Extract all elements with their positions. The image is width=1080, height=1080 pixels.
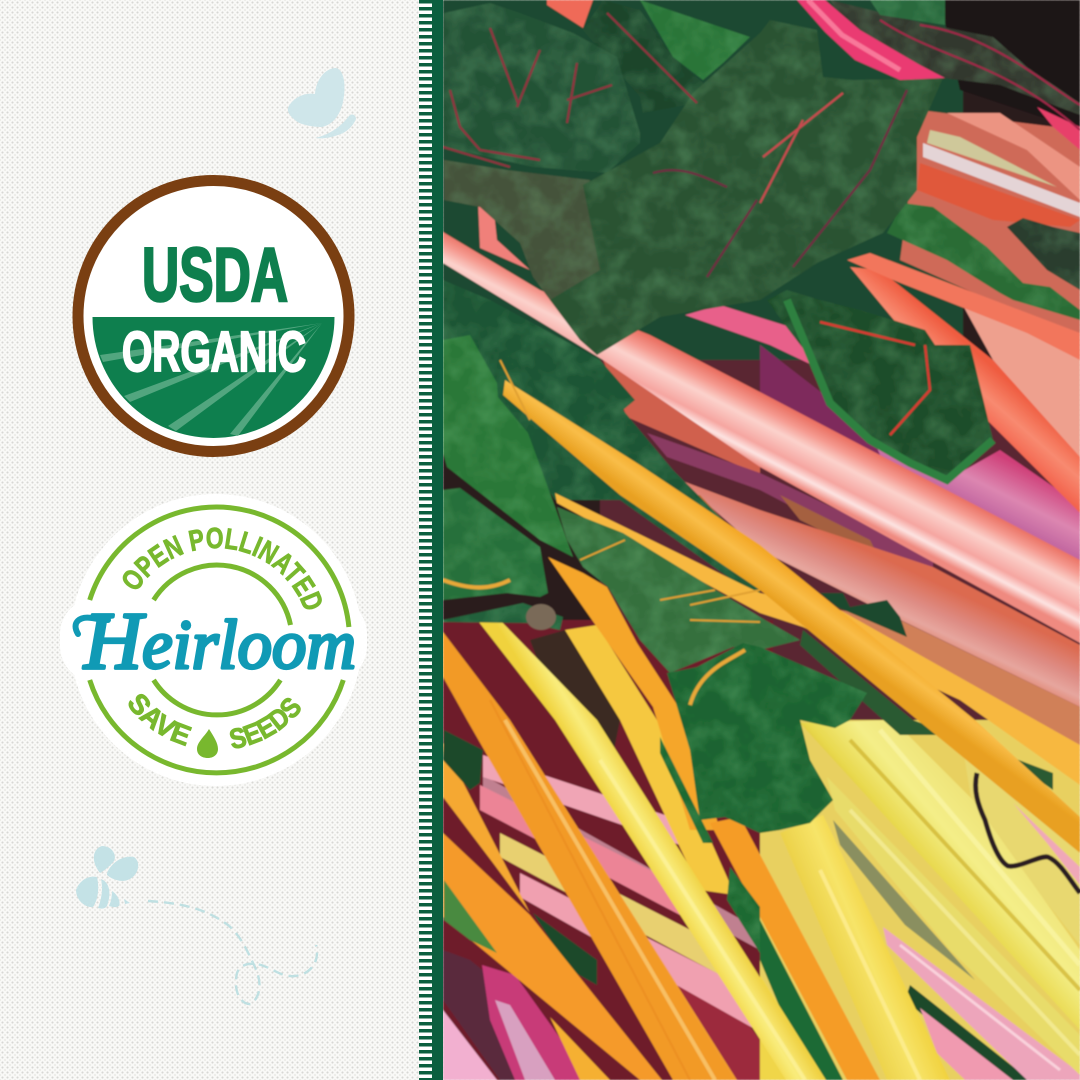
SAVE text: SAVE xyxy=(128,694,192,746)
decorative striped edge xyxy=(419,0,443,1080)
seal ring xyxy=(78,180,349,452)
SEEDS text: SEEDS xyxy=(230,698,301,748)
bottom right back stalks: pale yellow, pink and grey green xyxy=(760,720,1080,1080)
stalk highlights xyxy=(490,700,1080,1080)
orange stalks in front of pink xyxy=(503,380,1080,853)
dashed flight path xyxy=(148,901,317,1004)
chard leaves xyxy=(443,0,1080,953)
icon: seed xyxy=(197,729,218,758)
OPEN POLLINATED text: OPEN POLLINATED xyxy=(122,527,322,610)
white backing xyxy=(60,494,367,786)
leaf veins xyxy=(443,13,930,435)
field rays xyxy=(100,323,322,436)
background shadow xyxy=(443,0,1080,1080)
icon: bee with dashed flight path xyxy=(76,846,318,1006)
dried stem spot xyxy=(526,604,556,630)
badge: USDA Organic seal xyxy=(72,175,354,457)
top right stalks xyxy=(443,0,1080,643)
middle back stalks: magenta, purple, red xyxy=(603,345,1080,750)
bottom yellow and orange stalks xyxy=(443,557,880,1080)
bee xyxy=(76,846,138,909)
photo: rainbow chard stalks and leaves xyxy=(443,0,1080,1080)
base colour regions xyxy=(443,0,1080,1080)
yellow leaf veins xyxy=(443,360,760,705)
USDA text: USDA xyxy=(142,233,288,318)
black root xyxy=(976,773,1080,893)
upper leaf behind orange stalks xyxy=(443,280,760,600)
badge: Heirloom seal xyxy=(60,494,367,786)
icon: butterfly xyxy=(288,68,356,138)
pink stalk at top with veins xyxy=(797,0,1080,130)
green field xyxy=(92,317,334,438)
Heirloom script text: Heirloom xyxy=(83,595,356,686)
rings xyxy=(90,507,349,773)
bottom back stalks: reds and pinks xyxy=(443,755,760,1080)
leaf rim xyxy=(787,300,993,480)
photo artwork xyxy=(443,0,1080,1080)
